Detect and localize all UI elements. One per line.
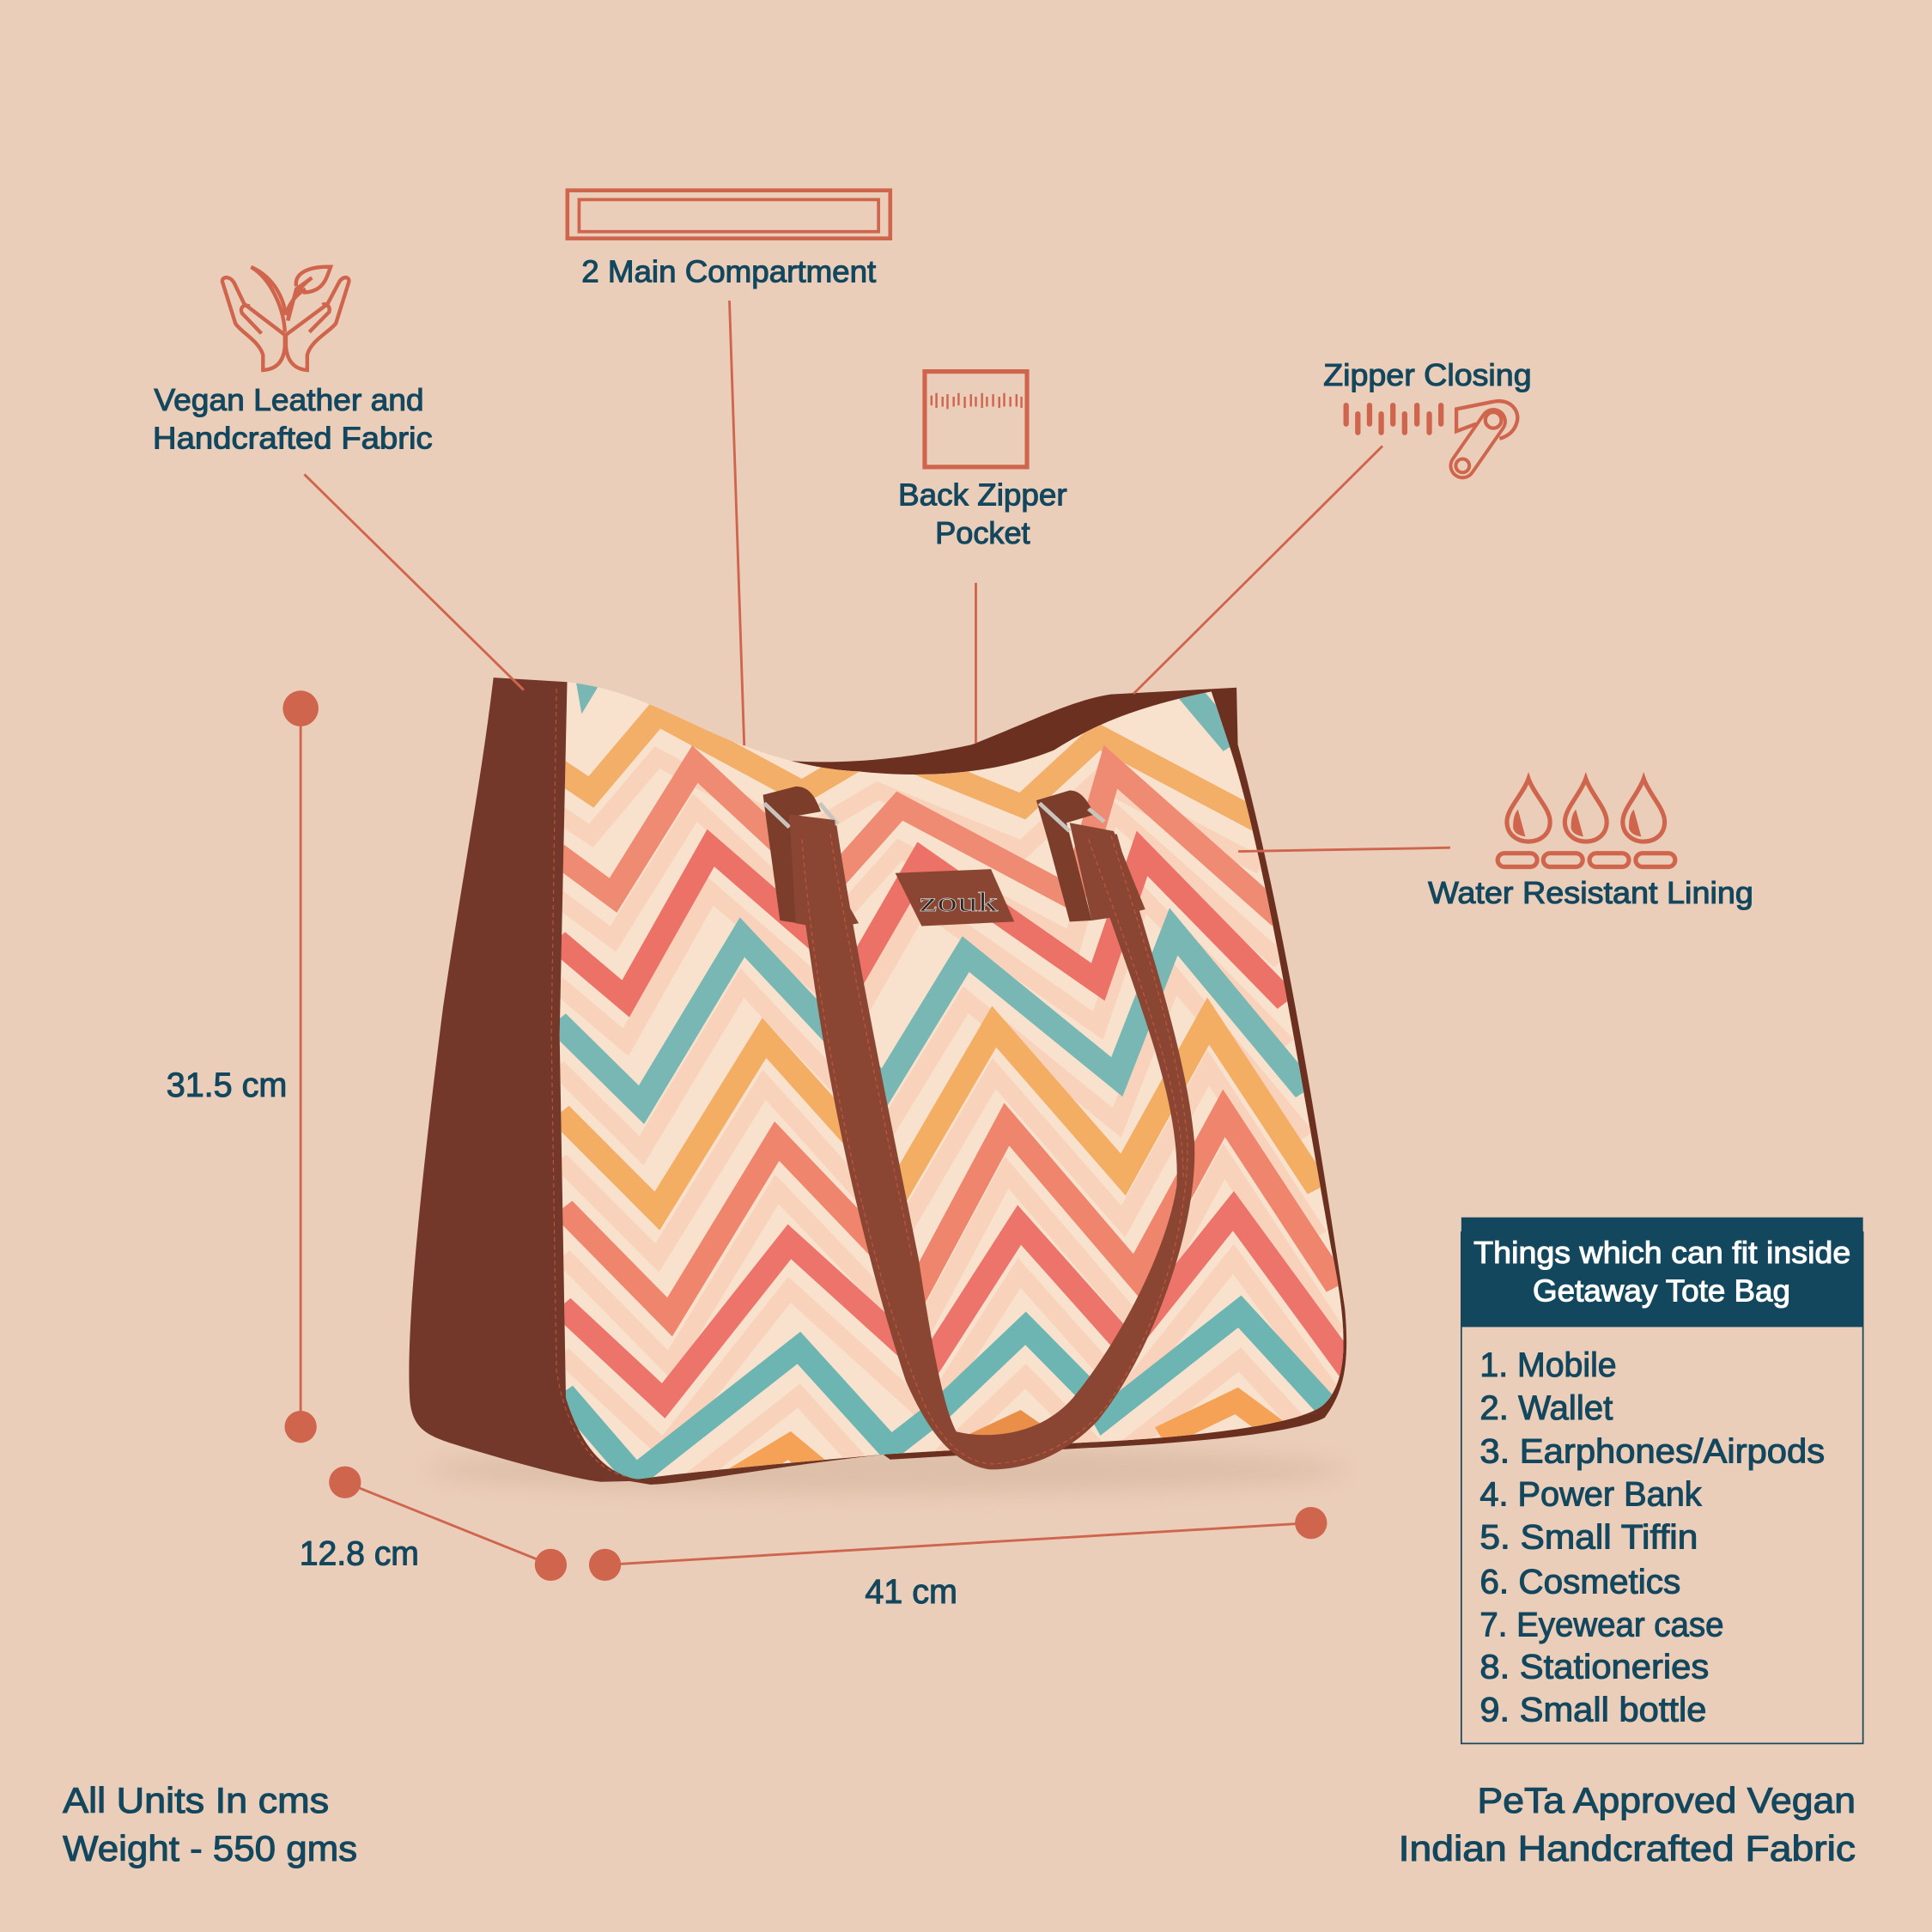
list of items: 7. Eyewear case <box>1479 1606 1723 1644</box>
callout leader lines <box>304 301 1450 852</box>
note: peta approved: Indian Handcrafted Fabric <box>1399 1828 1856 1868</box>
right strap tab and ring <box>1036 790 1145 921</box>
note: peta approved: PeTa Approved Vegan <box>1478 1780 1856 1820</box>
label: 2 main compartment: 2 Main Compartment <box>581 255 876 289</box>
list of items: 3. Earphones/Airpods <box>1479 1431 1825 1470</box>
list of items <box>1479 1346 1825 1729</box>
bag shadow <box>425 1445 1349 1495</box>
note: units and weight: All Units In cms <box>63 1780 329 1820</box>
fabric front panel with chevrons <box>560 682 1344 1479</box>
brown side panel <box>409 677 645 1482</box>
icon: water drops and lining <box>1498 779 1675 866</box>
list of items: 2. Wallet <box>1479 1388 1613 1427</box>
panel header: Things which can fit inside <box>1473 1236 1850 1270</box>
list of items: 4. Power Bank <box>1479 1475 1703 1514</box>
dimension: height: 31.5 cm <box>167 1066 287 1104</box>
side panel stitching <box>551 689 626 1476</box>
icon: back zipper pocket <box>925 372 1027 467</box>
tote bag photo illustration <box>409 672 1363 1524</box>
panel: things which can fit inside <box>1461 1218 1863 1743</box>
icon: main compartment <box>568 191 890 239</box>
left strap tab and ring <box>763 787 859 929</box>
zouk logo patch: zouk <box>919 888 999 917</box>
label: back zipper pocket <box>898 477 1067 550</box>
label: vegan leather <box>153 383 433 455</box>
list of items: 5. Small Tiffin <box>1479 1518 1698 1557</box>
note: peta approved <box>1399 1780 1856 1868</box>
dimension: height <box>167 690 319 1443</box>
strap stitching <box>802 834 1188 1464</box>
note: units and weight: Weight - 550 gms <box>63 1828 357 1868</box>
icon: hands holding plant <box>222 267 349 370</box>
label: back zipper pocket: Pocket <box>935 516 1030 550</box>
label: zipper closing: Zipper Closing <box>1323 358 1532 392</box>
icon: zipper <box>1346 401 1517 472</box>
bag bottom edge <box>600 1370 1318 1485</box>
label: vegan leather: Handcrafted Fabric <box>153 421 433 455</box>
dimension: width: 41 cm <box>865 1572 957 1611</box>
shoulder strap <box>789 817 1194 1469</box>
panel header <box>1461 1218 1863 1327</box>
note: units and weight <box>63 1780 357 1868</box>
label: vegan leather: Vegan Leather and <box>154 383 424 417</box>
dimension: depth: 12.8 cm <box>300 1534 419 1572</box>
dimension: depth <box>300 1467 567 1581</box>
list of items: 8. Stationeries <box>1479 1647 1709 1686</box>
list of items: 6. Cosmetics <box>1479 1562 1680 1601</box>
label: water resistant lining: Water Resistant Lining <box>1428 876 1753 910</box>
bag back interior lip <box>764 688 1346 1460</box>
label: back zipper pocket: Back Zipper <box>898 477 1067 512</box>
zouk logo patch <box>896 869 1014 927</box>
panel header: Getaway Tote Bag <box>1533 1273 1790 1308</box>
list of items: 1. Mobile <box>1479 1346 1617 1384</box>
dimension: width <box>589 1507 1327 1611</box>
list of items: 9. Small bottle <box>1479 1691 1706 1729</box>
